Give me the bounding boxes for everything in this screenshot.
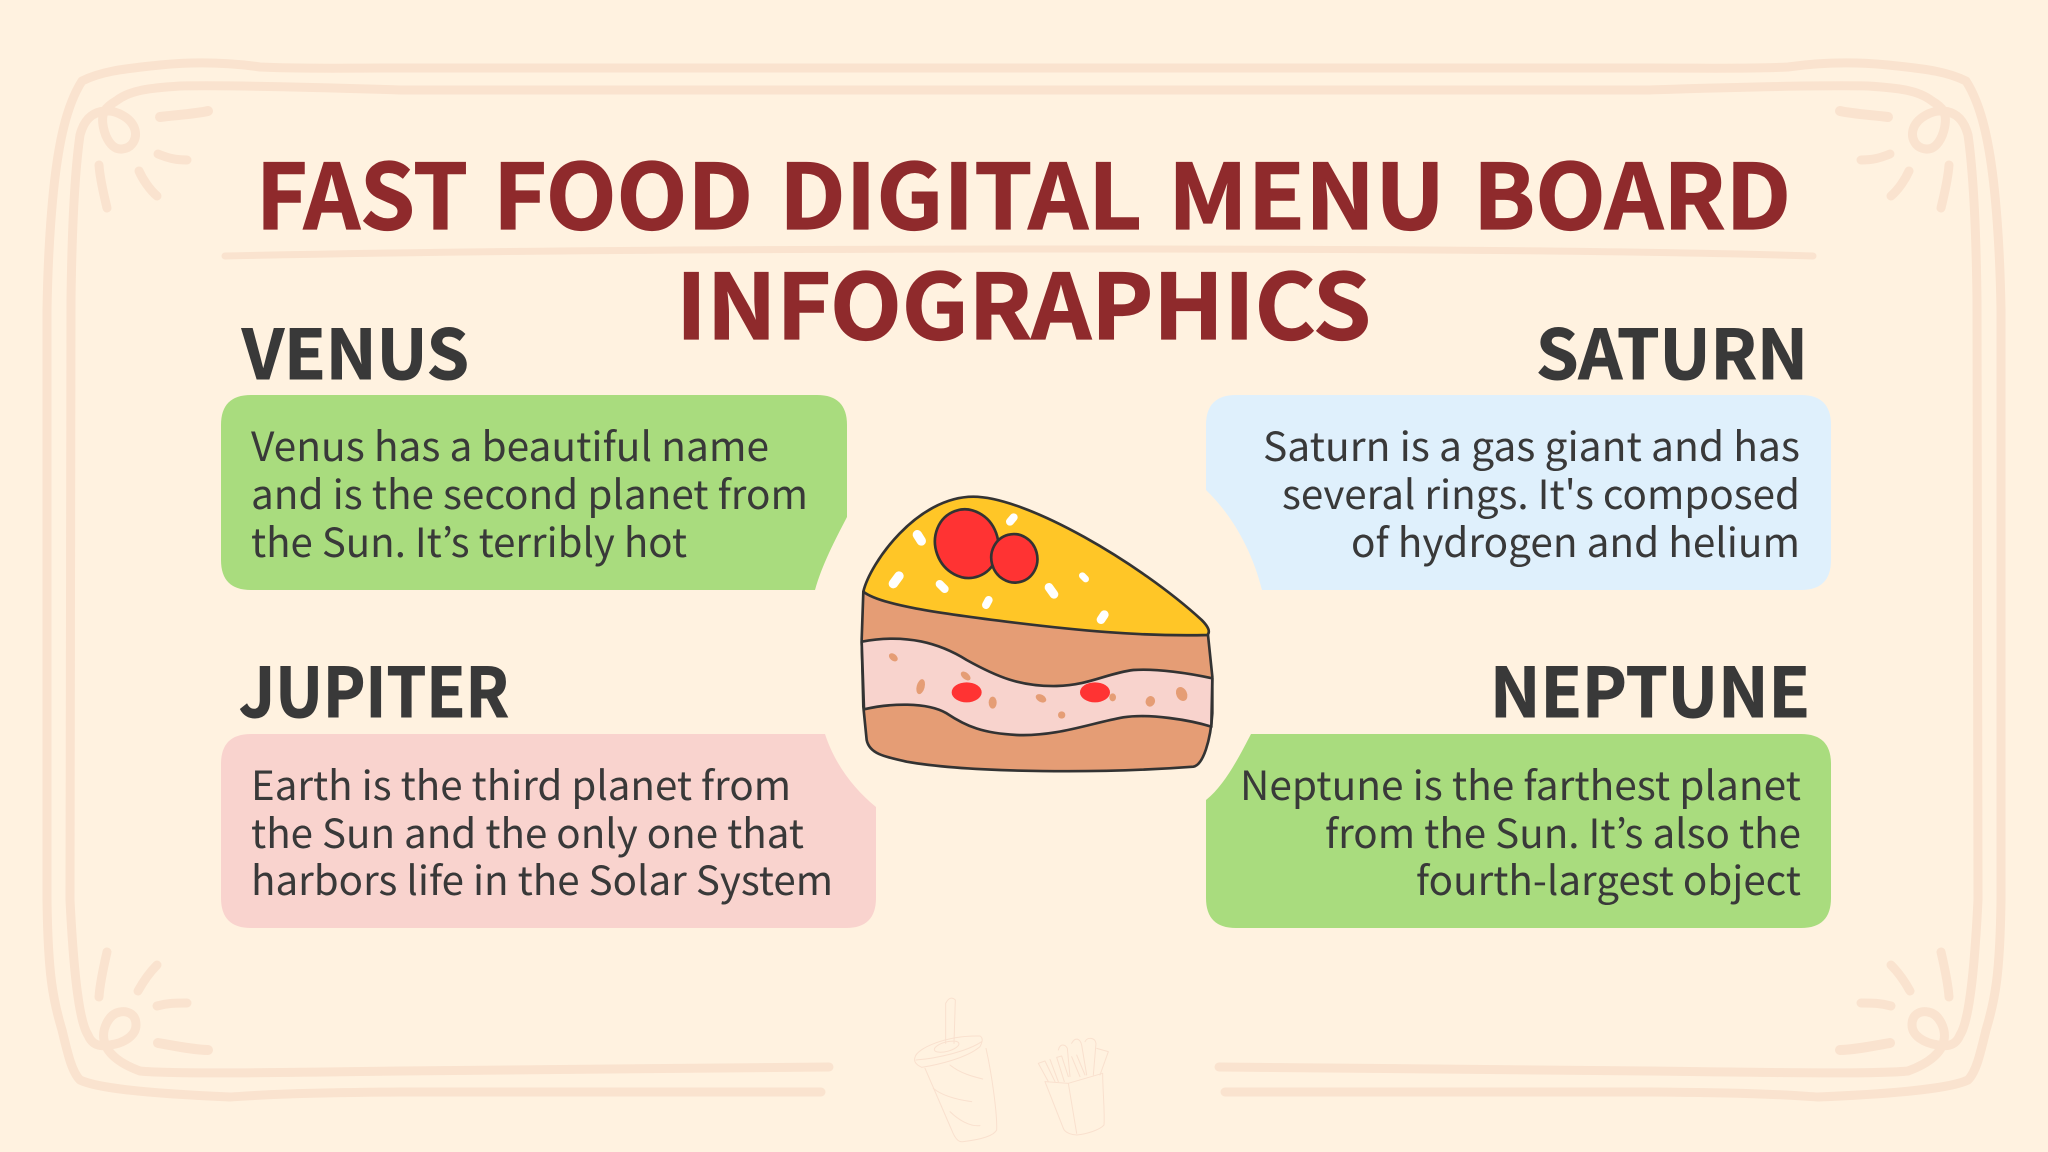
title: INFOGRAPHICS bbox=[676, 235, 1371, 365]
icon: faded drink cup bbox=[915, 998, 997, 1142]
text: Jupiter description: harbors life in the Solar System bbox=[251, 849, 833, 907]
text: Venus description: Venus has a beautiful name bbox=[251, 415, 769, 473]
text: Neptune description: Neptune is the farthest planet bbox=[1240, 754, 1801, 812]
text: Neptune description: from the Sun. It’s also the bbox=[1325, 802, 1801, 860]
speech bubble: Jupiter bbox=[221, 734, 876, 928]
heading: Venus: VENUS bbox=[241, 300, 469, 399]
text: Jupiter description: the Sun and the only one that bbox=[251, 802, 804, 860]
text: Venus description: and is the second planet from bbox=[251, 463, 808, 521]
panel: Neptune bbox=[1206, 638, 1831, 928]
speech bubble: Neptune bbox=[1206, 734, 1831, 928]
text: Saturn description bbox=[1263, 415, 1800, 569]
title: MENU bbox=[1168, 125, 1445, 255]
text: Saturn description: several rings. It's composed bbox=[1282, 463, 1800, 521]
panel: Jupiter bbox=[221, 638, 876, 928]
text: Neptune description bbox=[1240, 754, 1801, 907]
text: Neptune description: fourth-largest object bbox=[1416, 849, 1801, 907]
title: BOARD bbox=[1473, 125, 1791, 255]
text: Jupiter description bbox=[251, 754, 833, 907]
speech bubble: Saturn bbox=[1206, 395, 1831, 590]
text: Jupiter description: Earth is the third planet from bbox=[251, 754, 791, 812]
icon: faded french fries bbox=[1038, 1038, 1108, 1135]
heading: Neptune: NEPTUNE bbox=[1490, 638, 1810, 737]
speech bubble: Venus bbox=[221, 395, 847, 590]
panel: Venus bbox=[221, 300, 847, 590]
text: Saturn description: Saturn is a gas giant and has bbox=[1263, 415, 1800, 473]
title: FOOD bbox=[493, 125, 753, 255]
panel: Saturn bbox=[1206, 300, 1831, 590]
heading: Saturn: SATURN bbox=[1536, 300, 1808, 399]
icon: cake slice bbox=[862, 497, 1212, 771]
text: Venus description bbox=[251, 415, 808, 569]
text: Venus description: the Sun. It’s terribly hot bbox=[251, 511, 687, 569]
heading: Jupiter: JUPITER bbox=[239, 638, 509, 737]
title divider line bbox=[225, 249, 1813, 256]
title: DIGITAL bbox=[779, 125, 1142, 255]
title bbox=[256, 125, 1791, 365]
title: FAST bbox=[256, 125, 468, 255]
text: Saturn description: of hydrogen and helium bbox=[1351, 511, 1800, 569]
